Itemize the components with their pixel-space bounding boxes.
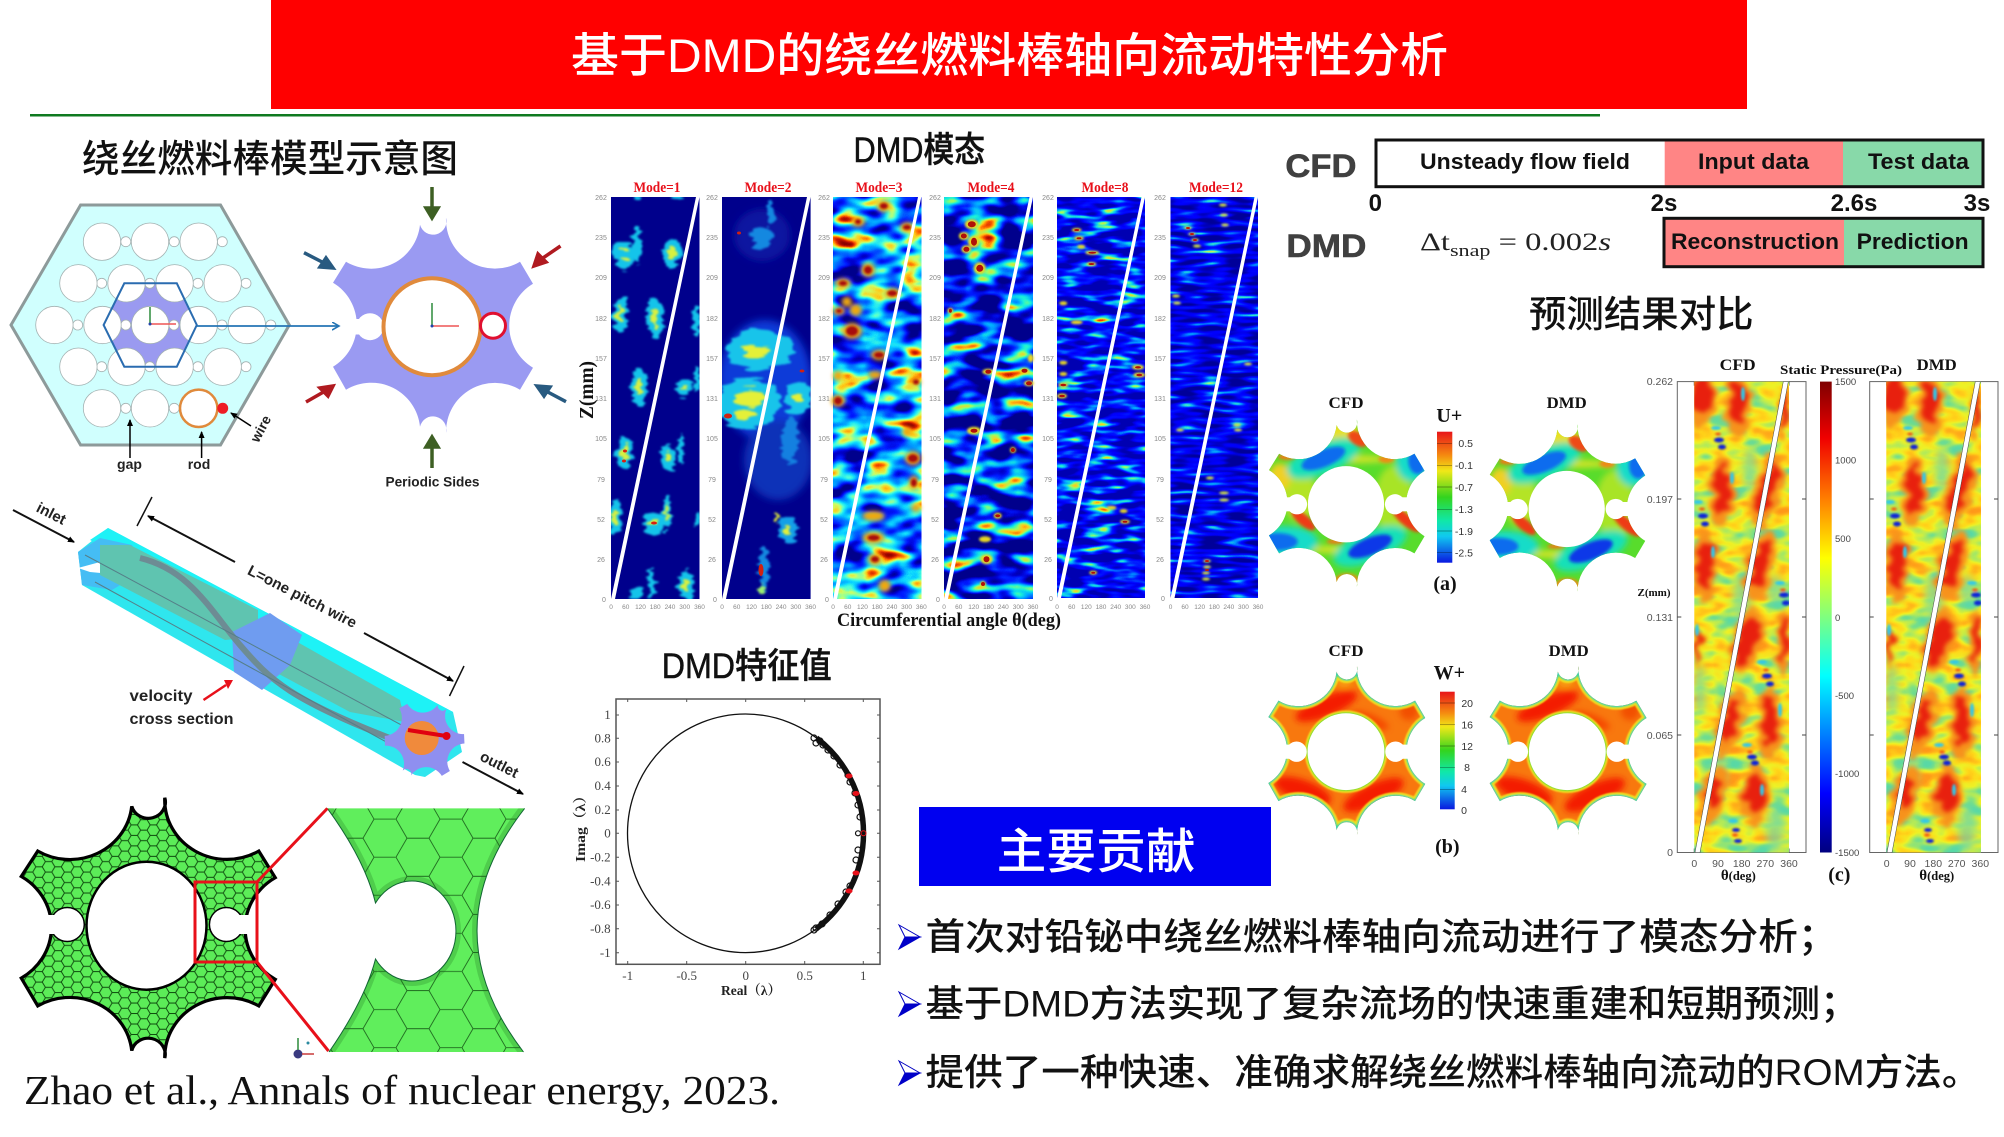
chart: Mode=8: 157 xyxy=(1042,356,1054,363)
bar: CFD timeline: Unsteady flow field xyxy=(1420,149,1630,174)
chart: Mode=3: 180 xyxy=(872,604,883,611)
colorbar: W+: 20 xyxy=(1461,698,1473,710)
mesh: whole cross section xyxy=(21,798,275,1058)
chart: Mode=2: 180 xyxy=(761,604,772,611)
chart: Mode=12: 235 xyxy=(1154,235,1166,242)
labels: gap, rod, wire xyxy=(117,412,274,472)
axis ticks: (c) xyxy=(1828,864,1850,886)
chart: Mode=8: 235 xyxy=(1042,235,1054,242)
chart: Mode=2: 52 xyxy=(708,517,716,524)
chart: Mode=8: 105 xyxy=(1042,436,1054,443)
chart: Mode=1: 0 xyxy=(602,597,606,604)
colorbar: U+: 0.5 xyxy=(1458,438,1473,450)
chart: Mode=1: 105 xyxy=(595,436,607,443)
chart: Mode=8: 262 xyxy=(1042,195,1054,202)
label: velocity cross section xyxy=(130,680,234,728)
chart: Mode=1: 180 xyxy=(650,604,661,611)
panel: 3D single-pitch rod geometry xyxy=(13,497,523,794)
chart: eigenvalues on unit circle: -0.6 xyxy=(590,897,611,912)
panel: W+ cross sections xyxy=(1260,643,1654,858)
chart: Mode=3: 26 xyxy=(820,557,828,564)
chart: Mode=12: 79 xyxy=(1156,477,1164,484)
colorbar: U+: U+ xyxy=(1436,405,1462,427)
chart: Mode=3: 105 xyxy=(818,436,830,443)
colorbar: U+ xyxy=(1436,405,1473,563)
chart: Mode=3: 360 xyxy=(916,604,927,611)
chart: Mode=4: 209 xyxy=(929,275,941,282)
chart: Mode=2: 26 xyxy=(708,557,716,564)
panel: U+ cross sections: CFD xyxy=(1328,395,1364,412)
chart: Mode=1: 235 xyxy=(595,235,607,242)
axis ticks: 90 xyxy=(1712,858,1724,870)
chart: eigenvalues on unit circle: 0 xyxy=(604,826,611,840)
label: DMD: DMD xyxy=(1286,228,1366,264)
contour: W+ DMD xyxy=(1490,666,1646,835)
chart: Mode=4: Mode=4 xyxy=(968,180,1014,196)
chart: Mode=1: 26 xyxy=(597,557,605,564)
chart: Mode=12: 209 xyxy=(1154,275,1166,282)
colorbar: W+ xyxy=(1434,662,1473,817)
axis ticks: 0.262 xyxy=(1647,376,1673,388)
chart: Mode=3: 79 xyxy=(820,477,828,484)
chart: Mode=8 xyxy=(1042,180,1151,611)
panel: static pressure maps: Z(mm) xyxy=(1638,587,1671,599)
labels and arrows: inlet, pitch, outlet xyxy=(13,497,523,794)
chart: Mode=4: 182 xyxy=(929,316,941,323)
colorbar: U+: -1.3 xyxy=(1455,504,1473,516)
chart: Mode=1: 131 xyxy=(595,396,607,403)
chart: eigenvalues on unit circle: -0.5 xyxy=(676,968,697,983)
label: velocity cross section: cross section xyxy=(130,711,234,728)
chart: Mode=12: 182 xyxy=(1154,316,1166,323)
chart: Mode=1: 60 xyxy=(622,604,630,611)
panel: static pressure maps: CFD xyxy=(1720,357,1756,374)
tick labels: time: 0 xyxy=(1369,190,1382,217)
formula: snapshot interval: snap xyxy=(1450,241,1491,260)
chart: eigenvalues on unit circle: -1 xyxy=(600,945,611,960)
chart: Mode=4: 120 xyxy=(968,604,980,611)
bar: DMD timeline xyxy=(1664,218,1983,267)
panel: computational mesh xyxy=(21,798,525,1058)
chart: Mode=8: 120 xyxy=(1081,604,1092,611)
panel: U+ cross sections: (a) xyxy=(1433,573,1457,595)
colorbar: static pressure: 1500 xyxy=(1835,377,1856,388)
chart: Mode=4: 0 xyxy=(936,597,940,604)
panel: static pressure maps xyxy=(1638,357,1998,886)
axis ticks: 0 xyxy=(1691,858,1697,870)
chart: Mode=12: 360 xyxy=(1253,604,1264,611)
chart: Mode=4: 26 xyxy=(931,557,939,564)
panel: DMD mode maps xyxy=(576,180,1264,631)
chart: Mode=12: 240 xyxy=(1223,604,1235,611)
chart: Mode=3: 235 xyxy=(818,235,830,242)
chart: eigenvalues on unit circle: -0.4 xyxy=(590,874,611,888)
chart: Mode=3: 240 xyxy=(886,604,898,611)
panel: static pressure maps: Static Pressure(Pa) xyxy=(1780,362,1902,377)
axis ticks: 0 xyxy=(1884,858,1890,870)
chart: eigenvalues on unit circle: 1 xyxy=(604,707,611,722)
colorbar: W+: 8 xyxy=(1464,762,1470,774)
panel: W+ cross sections: CFD xyxy=(1328,643,1364,660)
labels and arrows: inlet, pitch, outlet: L=one pitch wire xyxy=(245,562,359,632)
panel: W+ cross sections: (b) xyxy=(1435,836,1460,858)
labels: gap, rod, wire: rod xyxy=(188,456,210,472)
chart: Mode=3: Mode=3 xyxy=(856,180,902,196)
chart: Mode=3: 182 xyxy=(818,316,830,323)
arrow: unit cell to enlarged view xyxy=(197,325,338,327)
panel: U+ cross sections: DMD xyxy=(1547,395,1587,412)
colorbar: static pressure: 1000 xyxy=(1835,456,1856,466)
colorbar: W+: W+ xyxy=(1434,662,1465,684)
chart: Mode=8: 240 xyxy=(1110,604,1122,611)
chart: eigenvalues on unit circle: 0 xyxy=(742,968,749,983)
banner: main contributions: 主要贡献 xyxy=(997,826,1196,879)
chart: Mode=2: 0 xyxy=(713,597,717,604)
chart: Mode=4: 300 xyxy=(1013,604,1024,611)
axis ticks: 180 xyxy=(1733,858,1751,870)
chart: Mode=4: 52 xyxy=(931,517,939,524)
axis ticks: 270 xyxy=(1948,858,1966,870)
chart: eigenvalues on unit circle: -0.8 xyxy=(590,921,611,936)
colorbar: W+: 4 xyxy=(1461,784,1467,796)
mesh: enlarged local view xyxy=(327,808,525,1052)
colorbar: U+: -0.1 xyxy=(1455,460,1473,472)
bar: CFD timeline: Test data xyxy=(1868,149,1970,174)
axis ticks: θ(deg) xyxy=(1919,868,1954,884)
chart: Mode=12: 52 xyxy=(1156,517,1164,524)
heatmap: DMD pressure xyxy=(1870,369,1998,854)
axis label: Z(mm): Z(mm) xyxy=(576,361,598,419)
title banner: 基于DMD的绕丝燃料棒轴向流动特性分析 xyxy=(571,29,1448,82)
chart: Mode=4: 105 xyxy=(929,436,941,443)
heading: model schematic: 绕丝燃料棒模型示意图 xyxy=(82,139,458,181)
chart: Mode=8: 180 xyxy=(1096,604,1107,611)
chart: Mode=3: 300 xyxy=(901,604,912,611)
chart: Mode=4: 360 xyxy=(1028,604,1039,611)
chart: Mode=12: 180 xyxy=(1209,604,1220,611)
axis ticks: θ(deg) xyxy=(1721,868,1756,884)
label: CFD: CFD xyxy=(1285,148,1356,184)
chart: Mode=4: 235 xyxy=(929,235,941,242)
chart: Mode=4 xyxy=(929,180,1039,611)
chart: Mode=2: Mode=2 xyxy=(744,180,792,196)
contour: W+ CFD xyxy=(1268,666,1426,834)
formula: snapshot interval: = 0.002 xyxy=(1491,229,1598,256)
list: contributions xyxy=(899,916,1980,1093)
chart: Mode=1: 157 xyxy=(595,356,607,363)
chart: Mode=12: 0 xyxy=(1161,596,1165,603)
chart: Mode=12: 131 xyxy=(1154,396,1166,403)
chart: eigenvalues on unit circle: 0.2 xyxy=(594,802,611,817)
chart: Mode=8: 182 xyxy=(1042,316,1054,323)
chart: Mode=1: 120 xyxy=(635,604,646,611)
eigenvalue markers xyxy=(811,735,866,933)
heatmap: CFD pressure xyxy=(1677,369,1806,854)
bar: DMD timeline: Reconstruction xyxy=(1671,229,1839,254)
chart: Mode=8: Mode=8 xyxy=(1082,180,1128,196)
chart: Mode=3: 120 xyxy=(857,604,868,611)
chart: Mode=2: 60 xyxy=(733,604,741,611)
chart: Mode=12: 60 xyxy=(1181,604,1189,611)
chart: Mode=8: 60 xyxy=(1068,604,1076,611)
chart: Mode=12: Mode=12 xyxy=(1189,180,1243,196)
chart: Mode=3: 0 xyxy=(831,604,835,611)
colorbar: static pressure: 0 xyxy=(1835,613,1840,624)
chart: Mode=8: 0 xyxy=(1049,596,1053,603)
chart: Mode=3: 209 xyxy=(818,275,830,282)
chart: Mode=8: 300 xyxy=(1125,604,1136,611)
colorbar: static pressure xyxy=(1820,377,1859,859)
chart: eigenvalues on unit circle: Real（λ） xyxy=(721,983,781,999)
chart: eigenvalues on unit circle xyxy=(573,699,880,999)
axis ticks: 0.065 xyxy=(1647,730,1673,742)
chart: eigenvalues on unit circle: 1 xyxy=(860,968,867,983)
chart: Mode=8: 360 xyxy=(1140,604,1151,611)
chart: Mode=3: 262 xyxy=(818,195,830,202)
colorbar: U+: -0.7 xyxy=(1455,482,1473,494)
formula: snapshot interval: s xyxy=(1598,229,1611,256)
heading: DMD eigenvalues: DMD特征值 xyxy=(662,647,832,686)
chart: Mode=3: 0 xyxy=(825,597,829,604)
panel: W+ cross sections: DMD xyxy=(1549,643,1589,660)
chart: eigenvalues on unit circle: 0.8 xyxy=(594,730,611,746)
chart: Mode=1: 209 xyxy=(595,275,607,282)
callout: red zoom box xyxy=(195,808,328,1051)
colorbar: static pressure: -1000 xyxy=(1835,769,1859,780)
chart: Mode=8: 26 xyxy=(1044,557,1052,564)
tick labels: time: 3s xyxy=(1964,190,1990,217)
chart: Mode=4: 240 xyxy=(998,604,1009,611)
chart: Mode=2: 120 xyxy=(746,604,757,611)
heading: prediction comparison: 预测结果对比 xyxy=(1529,294,1754,335)
chart: Mode=4: 0 xyxy=(942,604,946,611)
panel: wire-wrapped fuel rod model schematic xyxy=(11,139,566,490)
diagram: hexagonal rod bundle xyxy=(11,205,289,445)
chart: Mode=12: 262 xyxy=(1154,195,1166,202)
chart: Mode=3 xyxy=(818,180,927,611)
contour: U+ DMD xyxy=(1490,424,1646,592)
chart: Mode=12: 120 xyxy=(1194,604,1206,611)
labels: gap, rod, wire: gap xyxy=(117,456,142,472)
chart: eigenvalues on unit circle: Imag（λ） xyxy=(573,788,589,862)
colorbar: static pressure: -500 xyxy=(1835,691,1854,702)
axis ticks: 0.197 xyxy=(1647,494,1673,506)
chart: Mode=2: 182 xyxy=(706,316,718,323)
chart: Mode=12: 105 xyxy=(1154,436,1166,443)
tick labels: time: 2.6s xyxy=(1831,190,1877,217)
chart: Mode=8: 0 xyxy=(1055,604,1059,611)
chart: Mode=2: 79 xyxy=(708,477,716,484)
chart: Mode=2: 105 xyxy=(706,436,718,443)
chart: Mode=2: 262 xyxy=(706,195,718,202)
axis ticks: 360 xyxy=(1972,858,1989,870)
icon: axis triad xyxy=(294,1038,314,1058)
chart: eigenvalues on unit circle: 0.4 xyxy=(594,778,611,793)
formula: snapshot interval: Δt xyxy=(1420,229,1443,256)
chart: Mode=2: 209 xyxy=(706,275,718,282)
diagram: enlarged unit cell with periodic sides: Periodic Sides xyxy=(386,474,480,490)
chart: Mode=12: 26 xyxy=(1156,557,1164,564)
panel: CFD and DMD time windows xyxy=(1285,140,1990,267)
axis ticks: 180 xyxy=(1925,858,1942,870)
chart: Mode=2: 300 xyxy=(790,604,802,611)
bullet 2: 基于DMD方法实现了复杂流场的快速重建和短期预测； xyxy=(926,984,1858,1024)
chart: Mode=4: 157 xyxy=(929,356,941,363)
chart: Mode=3: 157 xyxy=(818,356,830,363)
label: velocity cross section: velocity xyxy=(130,688,193,705)
chart: eigenvalues on unit circle: -1 xyxy=(622,968,633,983)
tick labels: time: 2s xyxy=(1651,190,1677,217)
chart: Mode=12: 300 xyxy=(1238,604,1249,611)
diagram: enlarged unit cell with periodic sides xyxy=(304,187,566,490)
banner: main contributions xyxy=(919,807,1271,886)
colorbar: W+: 16 xyxy=(1461,720,1473,732)
chart: Mode=2 xyxy=(706,180,816,611)
colorbar: U+: -2.5 xyxy=(1455,548,1473,560)
colorbar: W+: 12 xyxy=(1461,741,1473,753)
chart: Mode=12 xyxy=(1154,180,1264,611)
chart: Mode=1: 262 xyxy=(595,195,607,202)
title banner xyxy=(271,0,1747,109)
citation: Zhao et al., Annals of nuclear energy, 2023. xyxy=(24,1067,780,1113)
bullet 1: 首次对铅铋中绕丝燃料棒轴向流动进行了模态分析； xyxy=(926,916,1838,958)
chart: eigenvalues on unit circle: 0.6 xyxy=(594,754,611,769)
heading: DMD modes: DMD模态 xyxy=(854,131,985,170)
axis ticks: 270 xyxy=(1757,858,1774,870)
chart: Mode=8: 79 xyxy=(1044,477,1052,484)
panel: U+ cross sections xyxy=(1269,398,1646,594)
colorbar: U+: -1.9 xyxy=(1455,526,1473,538)
chart: Mode=3: 52 xyxy=(820,517,828,524)
chart: Mode=1 xyxy=(595,180,705,611)
chart: Mode=2: 235 xyxy=(706,235,718,242)
colorbar: static pressure: -1500 xyxy=(1835,848,1859,859)
chart: Mode=8: 52 xyxy=(1044,517,1052,524)
colorbar: W+: 0 xyxy=(1461,805,1467,817)
chart: Mode=1: 240 xyxy=(665,604,676,611)
chart: Mode=8: 209 xyxy=(1042,275,1054,282)
axis ticks: 0 xyxy=(1667,847,1673,859)
chart: Mode=8: 131 xyxy=(1042,396,1054,403)
chart: Mode=2: 360 xyxy=(805,604,816,611)
bar: CFD timeline: Input data xyxy=(1698,149,1810,174)
chart: Mode=12: 0 xyxy=(1169,604,1173,611)
colorbar: static pressure: 500 xyxy=(1835,534,1851,545)
chart: Mode=4: 79 xyxy=(931,477,939,484)
labels: gap, rod, wire: wire xyxy=(246,412,274,446)
bullet 3: 提供了一种快速、准确求解绕丝燃料棒轴向流动的ROM方法。 xyxy=(926,1052,1980,1093)
labels and arrows: inlet, pitch, outlet: outlet xyxy=(477,748,521,782)
labels and arrows: inlet, pitch, outlet: inlet xyxy=(33,499,69,529)
chart: Mode=1: 79 xyxy=(597,477,605,484)
contour: U+ CFD xyxy=(1269,420,1424,586)
chart: Mode=2: 157 xyxy=(706,356,718,363)
bar: CFD timeline xyxy=(1376,140,1983,187)
chart: Mode=3: 131 xyxy=(818,396,830,403)
chart: Mode=4: 131 xyxy=(929,396,941,403)
axis ticks xyxy=(1647,376,1989,886)
chart: Mode=1: 182 xyxy=(595,316,607,323)
axis ticks: 360 xyxy=(1780,858,1798,870)
axis ticks: 90 xyxy=(1904,858,1916,870)
chart: Mode=1: 52 xyxy=(597,517,605,524)
chart: Mode=12: 157 xyxy=(1154,356,1166,363)
chart: Mode=2: 0 xyxy=(720,604,724,611)
chart: Mode=2: 240 xyxy=(776,604,787,611)
chart: Mode=1: 300 xyxy=(679,604,691,611)
bar: DMD timeline: Prediction xyxy=(1857,229,1969,254)
chart: Mode=3: 60 xyxy=(844,604,852,611)
chart: Mode=1: 360 xyxy=(694,604,705,611)
chart: Mode=4: 180 xyxy=(983,604,994,611)
chart: Mode=1: 0 xyxy=(609,604,613,611)
axis ticks: 0.131 xyxy=(1647,612,1673,624)
chart: Mode=2: 131 xyxy=(706,396,718,403)
chart: Mode=1: Mode=1 xyxy=(634,180,680,196)
axis label: circumferential angle: Circumferential angle θ(deg) xyxy=(837,611,1061,631)
chart: eigenvalues on unit circle: 0.5 xyxy=(797,968,813,983)
chart: Mode=4: 60 xyxy=(955,604,963,611)
chart: eigenvalues on unit circle: -0.2 xyxy=(590,850,611,864)
chart: Mode=4: 262 xyxy=(929,195,941,202)
panel: static pressure maps: DMD xyxy=(1917,357,1957,374)
